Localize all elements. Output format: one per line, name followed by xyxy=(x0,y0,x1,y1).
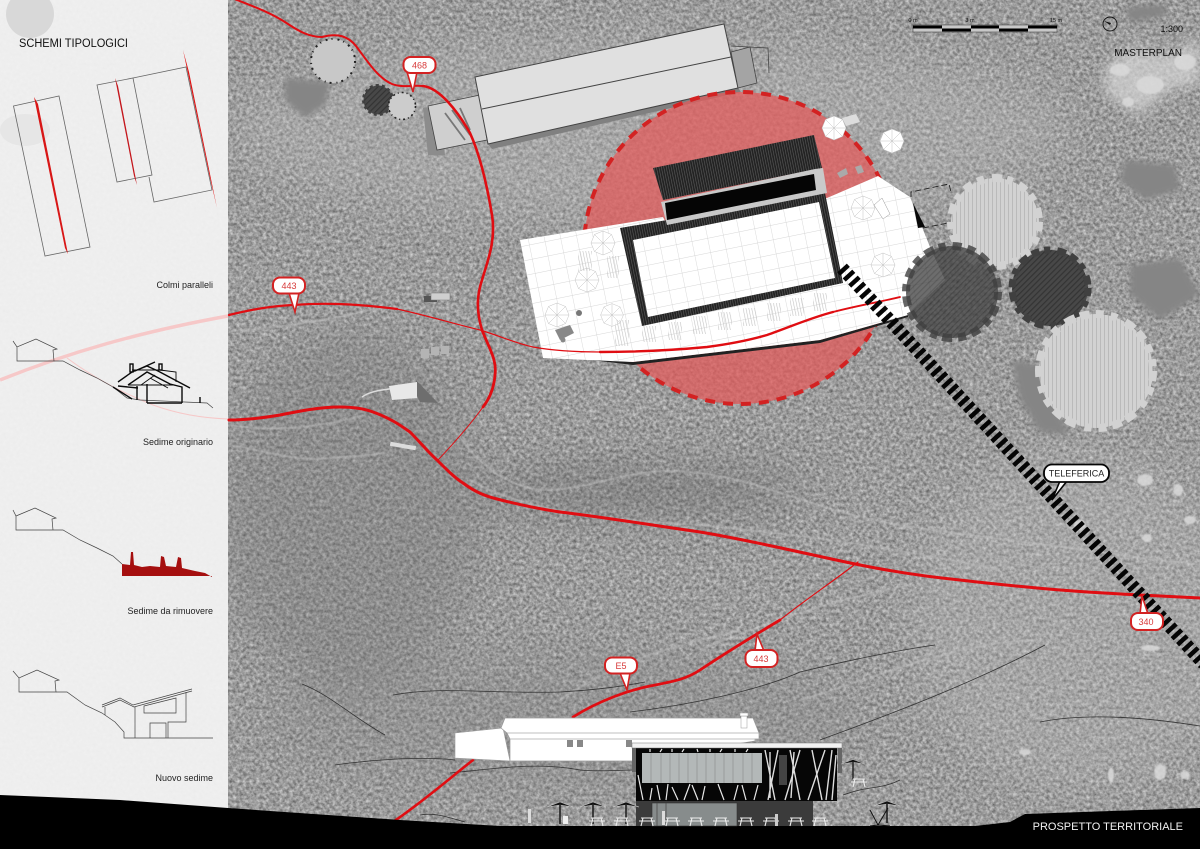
tree: light large north xyxy=(951,178,1039,266)
masterplan heading: MASTERPLAN xyxy=(1114,48,1182,59)
shed near road 443 xyxy=(421,293,450,358)
callout: 443 west: 443 xyxy=(281,281,297,291)
bottom black ground band xyxy=(0,795,1200,849)
label: nuovo sedime: Nuovo sedime xyxy=(155,773,213,783)
callout: 443 south xyxy=(746,634,778,667)
elevation furniture and figures xyxy=(528,760,900,826)
tree: dark west xyxy=(906,246,998,338)
callout: 443 west xyxy=(273,278,305,312)
dashed outline and wedge near terrace xyxy=(911,184,951,228)
panel title: SCHEMI TIPOLOGICI xyxy=(19,38,128,50)
schematic: nuovo sedime xyxy=(13,670,213,738)
terrace furniture xyxy=(545,196,895,346)
schematic: colmi paralleli xyxy=(14,50,217,256)
teleferica cable line xyxy=(842,268,1200,664)
existing building roof plan xyxy=(423,24,769,155)
prospetto heading: PROSPETTO TERRITORIALE xyxy=(1033,821,1183,833)
scale bar xyxy=(908,18,1063,32)
scale ratio: 1:300 xyxy=(1160,24,1183,34)
icon: north arrow xyxy=(1103,17,1117,31)
scale bar: 15 m xyxy=(1050,18,1063,24)
new building elevation xyxy=(632,743,842,826)
callout: 340: 340 xyxy=(1138,617,1154,627)
callout: teleferica: TELEFERICA xyxy=(1049,468,1104,478)
hiking routes in red xyxy=(229,0,1200,822)
tree: small light east xyxy=(388,92,416,120)
existing building elevation xyxy=(455,713,759,761)
terrace with paving grid xyxy=(520,176,945,365)
label: sedime da rimuovere: Sedime da rimuovere xyxy=(127,606,213,616)
outdoor umbrellas outside terrace xyxy=(822,114,904,178)
trees plan xyxy=(311,39,1153,428)
label: colmi paralleli: Colmi paralleli xyxy=(156,280,213,290)
tree: small light xyxy=(311,39,355,83)
new building plan xyxy=(620,135,843,326)
pale road trace across panel xyxy=(0,316,228,419)
callout: 468: 468 xyxy=(412,60,427,70)
callout: teleferica xyxy=(1044,464,1109,500)
callout: 443 south: 443 xyxy=(753,654,769,664)
label: sedime originario: Sedime originario xyxy=(143,437,213,447)
tree: dark east xyxy=(1012,250,1088,326)
ruin near trail xyxy=(362,380,438,450)
schematic: sedime da rimuovere xyxy=(13,508,212,577)
callout: 468 xyxy=(404,57,436,92)
tree: light large south xyxy=(1039,314,1153,428)
schematic: sedime originario xyxy=(13,339,213,408)
red demolition circle xyxy=(584,92,896,404)
scale bar: 3 m xyxy=(965,18,975,24)
scale bar: 0 m xyxy=(908,18,918,24)
callout: E5: E5 xyxy=(615,661,627,671)
tree: small dark xyxy=(364,86,392,114)
callout: 340 xyxy=(1131,596,1163,630)
left panel: schemi tipologici background xyxy=(0,0,228,830)
callout: E5 xyxy=(605,658,637,690)
